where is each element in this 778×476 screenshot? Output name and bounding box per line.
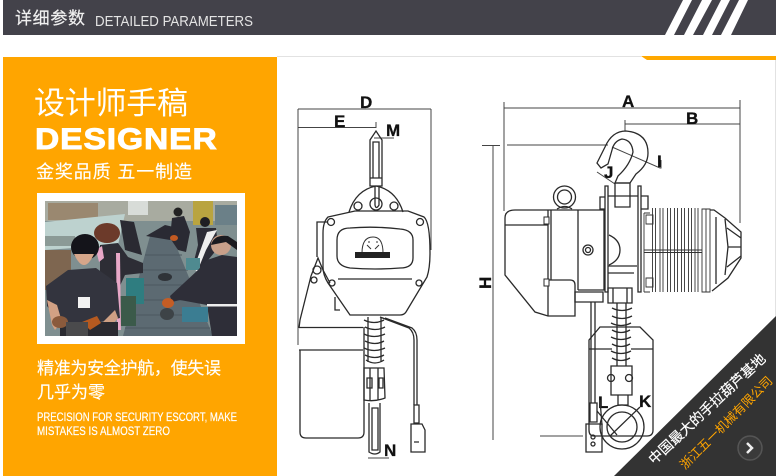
control panel (337, 227, 413, 269)
header title english: DETAILED PARAMETERS (95, 13, 253, 30)
diagram: front view hoist (298, 93, 431, 460)
panel heading DESIGNER: DESIGNER (35, 122, 218, 156)
banner title white: 中国最大的手拉葫芦基地 (645, 350, 769, 467)
label J: J (604, 163, 613, 182)
label M: M (386, 121, 400, 140)
top hook (370, 131, 382, 208)
content frame lines (277, 56, 776, 476)
hoist body (323, 211, 430, 315)
corner banner (614, 316, 776, 476)
panel subheading: 金奖品质 五一制造 (36, 162, 192, 182)
cooling fins (644, 208, 710, 292)
header stripes (665, 0, 748, 35)
bottom hook (597, 400, 644, 449)
pendant cable (380, 317, 417, 405)
icon: next arrow button (738, 436, 762, 460)
yoke (349, 186, 403, 212)
hook block (611, 366, 632, 405)
pendant control (411, 405, 425, 452)
label A: A (622, 92, 634, 111)
label D: D (360, 93, 372, 112)
end cap (710, 210, 741, 291)
label H: H (476, 277, 495, 289)
motor housing (505, 210, 605, 316)
tagline english: MISTAKES IS ALMOST ZERO (37, 426, 170, 438)
label B: B (686, 109, 698, 128)
label I: I (657, 152, 662, 171)
chain bag (589, 327, 653, 436)
tagline english: PRECISION FOR SECURITY ESCORT, MAKE (37, 412, 237, 424)
tagline chinese: 几乎为零 (37, 383, 105, 402)
lower connector (575, 288, 632, 303)
eye bolt (554, 186, 576, 209)
chain spring (364, 320, 385, 363)
header title chinese: 详细参数 (15, 9, 85, 28)
dimension lines A B H (482, 100, 740, 440)
label K: K (639, 392, 652, 411)
hook bracket (600, 186, 648, 292)
factory photo (37, 193, 245, 344)
dimension lines D E M (298, 109, 431, 458)
banner company orange: 浙江五一机械有限公司 (677, 373, 776, 472)
panel: designer (3, 57, 277, 476)
logo (355, 237, 390, 258)
bottom hook (369, 403, 380, 454)
chain bag (299, 327, 364, 438)
panel heading chinese: 设计师手稿 (34, 86, 188, 121)
chain spring (611, 308, 632, 360)
label L: L (598, 393, 608, 412)
pendant control (586, 403, 602, 452)
label N: N (384, 441, 396, 460)
cable (591, 302, 595, 403)
header bar (3, 0, 776, 35)
hook block (364, 368, 385, 401)
diagram: side view hoist (476, 92, 741, 452)
tagline chinese: 精准为安全护航，使失误 (37, 358, 221, 378)
top hook (597, 131, 648, 183)
label E: E (334, 112, 345, 131)
